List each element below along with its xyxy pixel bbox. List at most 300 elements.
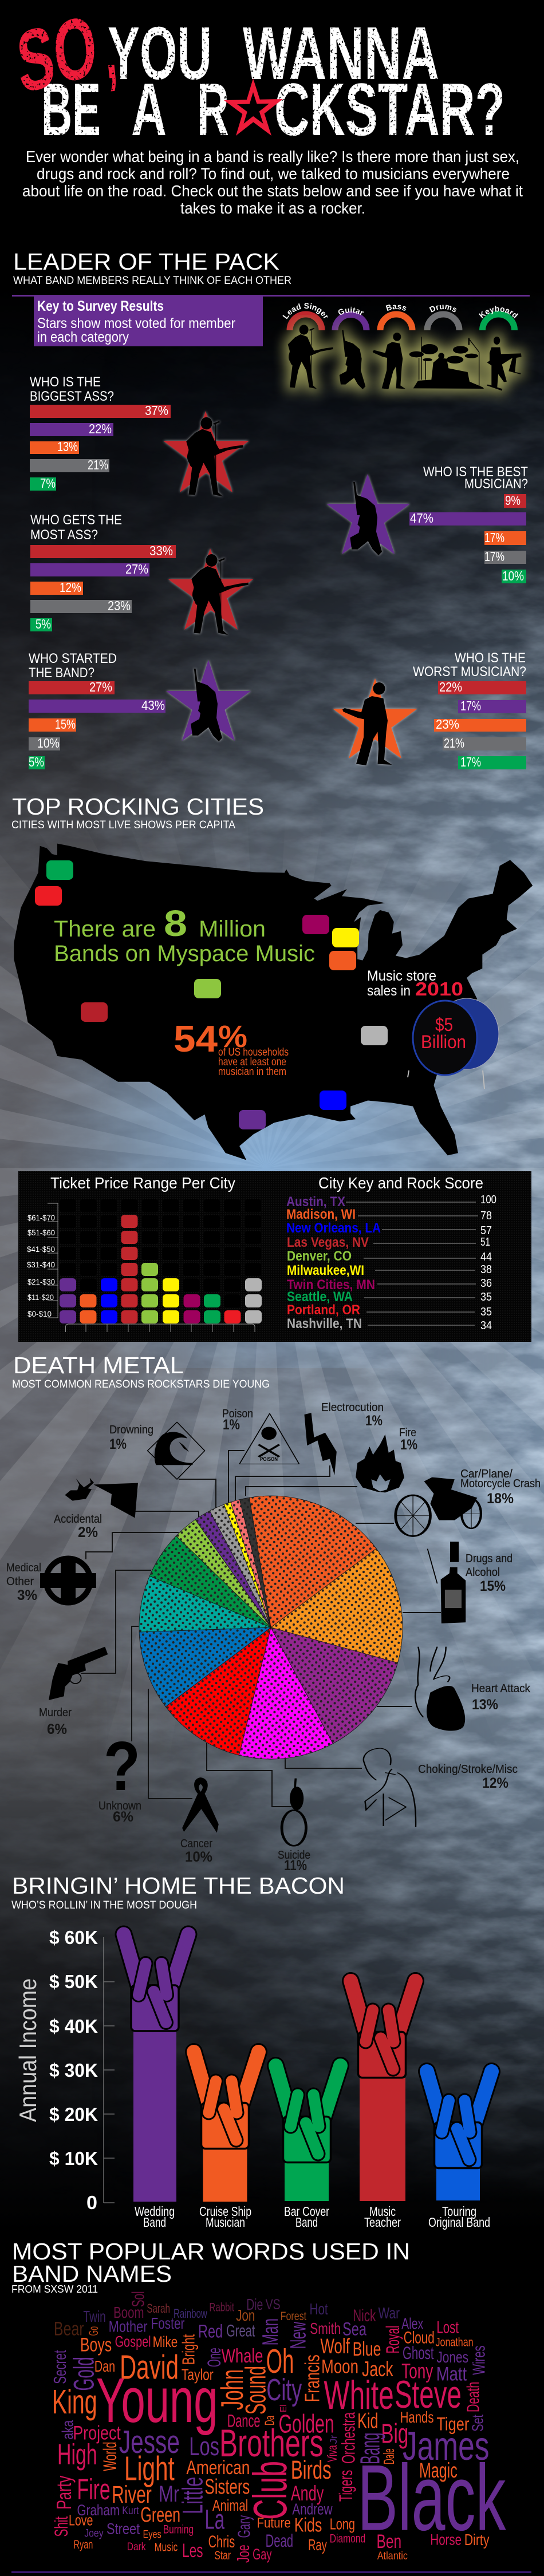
murder — [39, 1647, 108, 1737]
motorcycle crash: 18% — [487, 1491, 514, 1507]
income axis: $ 60K — [49, 1927, 98, 1948]
city key and rock scores: 44 — [480, 1251, 492, 1263]
word cloud: Long — [330, 2515, 355, 2533]
survey: worst musician: 17% — [460, 698, 481, 713]
word cloud: Jesse — [119, 2424, 180, 2460]
word cloud: Kurt — [122, 2504, 139, 2517]
word cloud: Dark — [127, 2541, 146, 2553]
touring original band: Touring — [442, 2204, 476, 2219]
wedding band — [124, 1934, 188, 2230]
fire: Fire — [399, 1427, 416, 1439]
survey: most ass — [30, 512, 176, 631]
word cloud: Red — [198, 2321, 223, 2342]
stat: 54% of households: 54 — [174, 1018, 218, 1060]
heading: death metal: DEATH METAL — [13, 1352, 184, 1378]
key to survey results: Key to Survey Results — [37, 298, 164, 314]
city markers — [35, 860, 388, 1129]
word cloud: Da — [263, 2416, 278, 2425]
city key and rock scores: 57 — [480, 1224, 492, 1237]
word cloud: American — [186, 2457, 250, 2479]
medical other: 3% — [17, 1587, 37, 1603]
word cloud: Tigers — [335, 2470, 356, 2502]
income axis: 0 — [86, 2192, 97, 2213]
word cloud: Chris — [208, 2533, 235, 2551]
survey: most ass: 23% — [108, 598, 131, 613]
word cloud: Matt — [436, 2364, 467, 2385]
survey: started the band: 15% — [55, 717, 76, 732]
word cloud: Forest — [281, 2309, 306, 2323]
suicide — [278, 1779, 310, 1874]
word cloud: Jack — [362, 2357, 393, 2381]
icon: bass drum — [408, 998, 499, 1089]
word cloud: Go — [86, 2326, 101, 2336]
title: YOU — [108, 11, 212, 95]
city key and rock scores: Madison, WI — [286, 1207, 356, 1222]
word cloud: Secret — [51, 2350, 70, 2384]
word cloud — [51, 2291, 506, 2563]
survey: biggest ass: BIGGEST ASS? — [30, 389, 114, 404]
heading: bringin' home the bacon: WHO’S ROLLIN’ IN THE MOST DOUGH — [11, 1899, 197, 1911]
word cloud: Burning — [163, 2522, 194, 2536]
stat: 8 million bands: There are — [54, 916, 156, 942]
word cloud: Mike — [153, 2333, 178, 2350]
survey: most ass: 33% — [149, 543, 173, 558]
word cloud: Love — [69, 2512, 93, 2529]
survey: started the band: 10% — [37, 736, 60, 750]
word cloud: Joey — [84, 2527, 104, 2539]
motorcycle crash — [396, 1468, 541, 1536]
chart: ticket price grid: $41-$50 — [27, 1244, 55, 1254]
word cloud: Little — [176, 2477, 208, 2514]
word cloud: Kids — [294, 2514, 322, 2536]
word cloud: Tiger — [436, 2413, 469, 2435]
star: guitar, best musician — [326, 474, 410, 555]
medical other — [6, 1557, 96, 1604]
stat: 54% of households: musician in them — [218, 1066, 286, 1078]
word cloud: Jones — [436, 2348, 468, 2366]
survey: best musician: 17% — [484, 549, 504, 564]
city key and rock scores: Denver, CO — [287, 1249, 352, 1264]
fire: 1% — [400, 1437, 417, 1453]
word cloud: Andy — [291, 2482, 324, 2506]
heading: most popular words: FROM SXSW 2011 — [11, 2283, 98, 2295]
survey: started the band: 27% — [89, 679, 112, 694]
word cloud: Sol — [129, 2291, 148, 2307]
motorcycle crash: Car/Plane/ — [460, 1468, 513, 1480]
income axis — [14, 1927, 115, 2213]
title: BE — [41, 68, 101, 151]
medical other: Medical — [6, 1562, 41, 1574]
word cloud: Tony — [401, 2360, 433, 2383]
poison: 1% — [223, 1417, 240, 1433]
word cloud: Rabbit — [209, 2300, 234, 2314]
word cloud: White — [324, 2373, 394, 2418]
drowning — [109, 1422, 205, 1479]
word cloud: Die — [246, 2295, 263, 2313]
income axis: $ 40K — [49, 2016, 98, 2037]
word cloud: Sound — [240, 2366, 271, 2415]
stat: 8 million bands: 8 — [164, 903, 187, 944]
electrocution: Electrocution — [321, 1401, 384, 1414]
chart: ticket price grid: $31-$40 — [27, 1260, 55, 1269]
income axis: $ 10K — [49, 2148, 98, 2169]
accidental fall: Accidental — [54, 1513, 102, 1526]
unknown: ? — [104, 1727, 140, 1805]
stat: music store sales: sales in — [367, 983, 411, 999]
survey: biggest ass: 22% — [89, 421, 112, 436]
word cloud: One — [203, 2348, 224, 2367]
title: A — [131, 68, 167, 151]
US map — [14, 844, 533, 1160]
word cloud: Boys — [80, 2334, 112, 2356]
stat: 54% of households — [174, 1018, 289, 1078]
band member key arcs: Lead Singer — [282, 303, 329, 319]
key to survey results — [34, 296, 263, 346]
stat: music store sales — [367, 968, 463, 999]
cancer ribbon — [180, 1777, 219, 1865]
word cloud: Dan — [94, 2357, 115, 2375]
word cloud: Boom — [113, 2304, 144, 2321]
income axis: $ 30K — [49, 2060, 98, 2081]
icon: bass drum: $5 — [435, 1014, 453, 1035]
word cloud: Les — [182, 2540, 203, 2562]
drowning: 1% — [109, 1436, 127, 1452]
word cloud: Bear — [54, 2318, 84, 2340]
survey: worst musician: 17% — [460, 754, 481, 769]
stat: 54% of households: % — [218, 1020, 247, 1054]
drugs and alcohol: Drugs and — [466, 1552, 513, 1565]
band member key arcs: Drums — [429, 305, 457, 313]
murder: Murder — [39, 1706, 72, 1719]
unknown: Unknown — [98, 1800, 141, 1812]
murder: 6% — [47, 1721, 67, 1737]
heart attack: Heart Attack — [471, 1682, 531, 1695]
cancer ribbon: 10% — [185, 1849, 212, 1865]
word cloud: Sarah — [147, 2302, 170, 2316]
background — [0, 321, 544, 2190]
survey: worst musician: WORST MUSICIAN? — [413, 664, 526, 679]
city key and rock scores: Las Vegas, NV — [287, 1235, 369, 1250]
chart: ticket price grid: $21-$30 — [27, 1277, 55, 1286]
key to survey results: Stars show most voted for member — [37, 315, 235, 331]
income axis: $ 50K — [49, 1971, 98, 1992]
intro text — [22, 148, 523, 217]
word cloud: Green — [140, 2503, 180, 2527]
city key and rock scores: New Orleans, LA — [286, 1220, 381, 1236]
city key and rock scores: Milwaukee,WI — [287, 1263, 364, 1278]
word cloud: Atlantic — [377, 2550, 408, 2562]
stars with winners — [163, 411, 417, 765]
word cloud: Great — [226, 2322, 255, 2341]
word cloud: Eyes — [143, 2528, 161, 2541]
word cloud: Whale — [222, 2345, 263, 2367]
survey: most ass: 12% — [60, 580, 81, 595]
poison — [222, 1408, 299, 1464]
word cloud: Hands — [400, 2408, 434, 2426]
word cloud: Death — [464, 2382, 483, 2412]
heading: top rocking cities: CITIES WITH MOST LIVE SHOWS PER CAPITA — [11, 819, 235, 831]
chart: ticket price grid: $51-$60 — [27, 1228, 55, 1237]
word cloud: Dirty — [464, 2531, 490, 2549]
city key and rock scores: 78 — [480, 1210, 492, 1222]
heading: leader of the pack — [13, 248, 291, 287]
heading: bringin' home the bacon: BRINGIN’ HOME THE BACON — [12, 1872, 345, 1899]
word cloud: Wires — [470, 2345, 489, 2375]
word cloud: Blue — [353, 2338, 381, 2360]
word cloud: World — [99, 2441, 120, 2471]
drowning: Drowning — [109, 1424, 153, 1436]
word cloud: Nick — [353, 2307, 376, 2325]
word cloud: Viva — [325, 2445, 340, 2462]
survey: most ass: MOST ASS? — [30, 527, 98, 543]
suicide: Suicide — [278, 1849, 310, 1862]
income axis: $ 20K — [49, 2104, 98, 2125]
word cloud: Dance — [227, 2411, 260, 2431]
survey: most ass: 5% — [36, 617, 51, 631]
word cloud: David — [120, 2349, 179, 2387]
connector lines — [81, 1451, 441, 1807]
word cloud: Jr — [329, 2435, 340, 2444]
word cloud: King — [52, 2383, 97, 2421]
band silhouettes — [288, 325, 522, 391]
word cloud: Magic — [419, 2459, 458, 2482]
unknown — [98, 1727, 141, 1825]
word cloud: Graham — [77, 2502, 120, 2519]
word cloud: Set — [469, 2415, 486, 2432]
word cloud: Party — [52, 2475, 76, 2510]
word cloud: High — [57, 2438, 97, 2471]
poison: POISON — [260, 1456, 278, 1462]
cancer ribbon: Cancer — [180, 1838, 212, 1850]
word cloud: Project — [73, 2422, 121, 2444]
word cloud: Brothers — [219, 2421, 324, 2465]
electrocution — [304, 1401, 384, 1475]
survey: biggest ass: 21% — [88, 457, 108, 472]
word cloud: Mother — [109, 2317, 148, 2336]
survey: biggest ass: 13% — [57, 439, 78, 454]
word cloud: aka — [58, 2420, 76, 2439]
accidental fall — [54, 1478, 138, 1540]
chart: ticket price grid — [27, 1199, 265, 1332]
suicide: 11% — [284, 1858, 307, 1874]
word cloud: Light — [124, 2450, 175, 2488]
word cloud: City — [266, 2372, 302, 2407]
drugs and alcohol: 15% — [480, 1578, 506, 1594]
survey: best musician: WHO IS THE BEST — [423, 464, 528, 480]
touring original band: Original Band — [428, 2215, 490, 2230]
survey: started the band: 43% — [141, 698, 165, 713]
title: WANNA — [243, 11, 439, 95]
heading: death metal — [12, 1352, 270, 1390]
heading: top rocking cities — [11, 793, 264, 831]
cruise ship musician: Cruise Ship — [199, 2204, 251, 2219]
city key and rock scores — [286, 1194, 496, 1332]
income axis: Annual Income — [14, 1978, 41, 2122]
intro text: takes to make it as a rocker. — [180, 199, 365, 217]
stat: 8 million bands — [54, 903, 315, 966]
word cloud: Ghost — [403, 2343, 434, 2363]
city key and rock scores: Nashville, TN — [287, 1316, 362, 1332]
choking: Choking/Stroke/Misc — [418, 1763, 518, 1776]
chart: ticket price grid: $11-$20 — [27, 1293, 54, 1302]
title: R — [197, 68, 229, 151]
word cloud: Moon — [321, 2356, 358, 2377]
city key and rock scores: Portland, OR — [287, 1302, 360, 1318]
touring original band — [427, 2071, 491, 2230]
word cloud: Music — [155, 2540, 178, 2554]
word cloud: Big — [381, 2419, 408, 2449]
cruise ship musician — [194, 2052, 259, 2230]
word cloud: Young — [96, 2365, 218, 2436]
word cloud: Club — [243, 2461, 297, 2520]
stat: 54% of households: have at least one — [218, 1056, 286, 1068]
word cloud: Man — [257, 2318, 282, 2345]
survey: biggest ass — [30, 374, 171, 491]
medical other: Other — [6, 1575, 34, 1588]
word cloud: Wolf — [320, 2335, 350, 2358]
survey: best musician: 10% — [502, 568, 524, 583]
survey: best musician — [409, 464, 528, 583]
survey: worst musician — [413, 650, 526, 769]
band member key arcs: Guitar — [338, 307, 364, 315]
music teacher: Teacher — [364, 2215, 401, 2230]
city key and rock scores: 34 — [480, 1319, 492, 1332]
word cloud: Andrew — [292, 2500, 333, 2518]
survey: best musician: MUSICIAN? — [464, 476, 528, 492]
survey: started the band: 5% — [29, 754, 44, 769]
title: , — [98, 0, 120, 97]
stat: 8 million bands: Bands on Myspace Music — [54, 941, 315, 966]
star: lead singer, biggest ass — [163, 411, 249, 496]
word cloud: Ray — [308, 2536, 327, 2554]
income chart: hands — [124, 1934, 491, 2230]
word cloud: Joe — [233, 2545, 253, 2563]
word cloud: Star — [215, 2549, 231, 2562]
chart: ticket price grid: $0-$10 — [27, 1309, 52, 1318]
fire — [356, 1427, 417, 1492]
star: bass, worst musician — [333, 678, 417, 765]
bar cover band — [276, 2065, 340, 2230]
city key and rock scores: 100 — [480, 1194, 496, 1206]
word cloud: Bang — [354, 2433, 385, 2464]
survey: best musician: 17% — [484, 530, 504, 545]
heart attack: 13% — [472, 1697, 498, 1713]
icon: bass drum: Billion — [421, 1032, 466, 1052]
word cloud: Jon — [236, 2306, 255, 2324]
word cloud: Jonathan — [436, 2335, 474, 2349]
survey: worst musician: 23% — [436, 717, 459, 732]
word cloud: John — [214, 2369, 250, 2410]
heading: bringin' home the bacon — [11, 1872, 345, 1911]
city key and rock scores: Twin Cities, MN — [287, 1277, 375, 1293]
word cloud: Dale — [380, 2448, 397, 2464]
word cloud: Francis — [300, 2354, 324, 2402]
word cloud: Animal — [212, 2496, 248, 2514]
city key and rock scores: Austin, TX — [286, 1194, 345, 1210]
music teacher — [350, 1981, 416, 2230]
city key and rock scores: 51 — [480, 1236, 490, 1249]
word cloud: La — [205, 2504, 224, 2535]
cruise ship musician: Musician — [206, 2215, 245, 2230]
wedding band: Band — [143, 2215, 166, 2230]
city key and rock scores: 38 — [480, 1263, 492, 1276]
star: guitar, started the band — [166, 660, 251, 741]
heading: top rocking cities: TOP ROCKING CITIES — [12, 793, 264, 820]
drugs and alcohol — [428, 1542, 513, 1623]
stat: music store sales: 2010 — [415, 978, 463, 999]
city key and rock scores: 36 — [480, 1277, 492, 1290]
survey: best musician: 9% — [505, 493, 521, 508]
wedding band: Wedding — [135, 2204, 175, 2219]
word cloud: Bright — [179, 2334, 198, 2365]
word cloud: Lost — [436, 2318, 459, 2337]
word cloud: River — [112, 2481, 152, 2508]
survey: most ass: 27% — [125, 562, 148, 576]
heading: most popular words: BAND NAMES — [12, 2261, 172, 2287]
word cloud: Hot — [310, 2300, 328, 2318]
word cloud: Kid — [357, 2409, 379, 2433]
stat: music store sales: Music store — [367, 968, 436, 984]
word cloud: Los — [189, 2432, 219, 2461]
word cloud: Rainbow — [174, 2307, 207, 2321]
pie chart: causes of death — [139, 1496, 403, 1759]
unknown: 6% — [113, 1809, 133, 1825]
word cloud: Horse — [430, 2531, 462, 2548]
panel: ticket prices and city key: City Key and Rock Score — [318, 1174, 483, 1192]
poison: Poison — [222, 1408, 253, 1420]
word cloud: Foster — [151, 2314, 184, 2332]
word cloud: Ben — [377, 2531, 401, 2553]
stat: 54% of households: of US households — [218, 1046, 289, 1058]
word cloud: Oh — [266, 2342, 294, 2380]
word cloud: Dead — [266, 2531, 293, 2551]
survey: worst musician: WHO IS THE — [455, 650, 526, 666]
word cloud: Fire — [77, 2473, 111, 2506]
drugs and alcohol: Alcohol — [466, 1566, 500, 1579]
chart: ticket price grid: $61-$70 — [27, 1213, 55, 1222]
word cloud: Gary — [235, 2515, 254, 2538]
star: lead singer, most ass — [168, 548, 253, 635]
music teacher: Music — [369, 2204, 396, 2219]
word cloud: Street — [107, 2520, 140, 2537]
word cloud: Ryan — [73, 2538, 93, 2551]
survey: biggest ass: WHO IS THE — [30, 374, 101, 390]
intro text: about life on the road. Check out the stats below and see if you have what it — [22, 182, 523, 200]
title — [13, 0, 505, 151]
word cloud: Cloud — [404, 2329, 435, 2347]
choking — [364, 1748, 518, 1827]
word cloud: Sea — [342, 2318, 366, 2340]
word cloud: Alex — [401, 2314, 423, 2333]
bar cover band: Bar Cover — [284, 2204, 329, 2219]
word cloud: Steve — [395, 2373, 462, 2416]
heart attack — [415, 1647, 531, 1731]
word cloud: Golden — [279, 2409, 334, 2439]
city key and rock scores: Seattle, WA — [287, 1289, 353, 1305]
word cloud: Mr — [159, 2482, 179, 2507]
heading: leader of the pack: WHAT BAND MEMBERS REALLY THINK OF EACH OTHER — [13, 275, 291, 287]
word cloud: Birds — [291, 2456, 332, 2484]
choking: 12% — [482, 1775, 508, 1791]
bar cover band: Band — [295, 2215, 318, 2230]
key to survey results: in each category — [37, 329, 129, 345]
word cloud: Royal — [382, 2326, 403, 2353]
survey: started the band: THE BAND? — [29, 665, 94, 681]
word cloud: Gospel — [115, 2333, 151, 2350]
survey: biggest ass: 7% — [40, 476, 56, 491]
survey: started the band — [29, 651, 165, 769]
survey: worst musician: 22% — [439, 679, 462, 694]
